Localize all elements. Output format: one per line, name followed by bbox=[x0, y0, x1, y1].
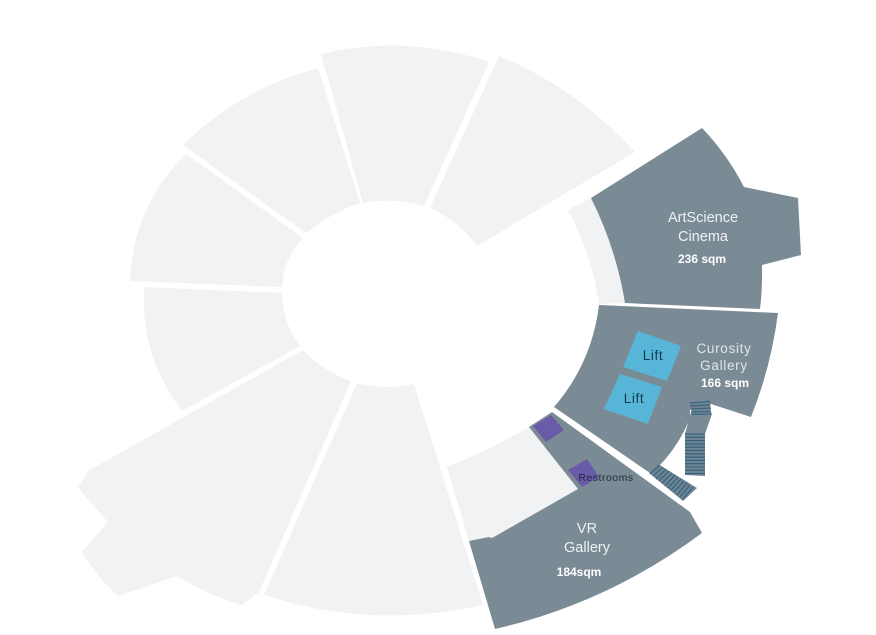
section: beside VR gallery bbox=[447, 427, 578, 541]
stairs: upper bbox=[690, 400, 711, 415]
stairs: lower bbox=[649, 464, 697, 501]
section: bottom left large bbox=[78, 350, 351, 605]
section: left lower bbox=[144, 287, 300, 411]
stairs: middle bbox=[685, 433, 705, 476]
icon: restroom 2 bbox=[568, 459, 599, 487]
icon: Lift 1 bbox=[623, 331, 681, 381]
section: left upper bbox=[130, 154, 303, 287]
label: VR: VR bbox=[577, 521, 597, 537]
section: top right bbox=[430, 56, 635, 246]
section: bottom bbox=[264, 383, 483, 615]
panel: VR Gallery bbox=[469, 412, 702, 629]
section: upper left bbox=[183, 68, 360, 233]
label: 184sqm: 184sqm bbox=[557, 565, 601, 579]
panel: Curosity Gallery bbox=[554, 305, 778, 501]
label: Cinema: Cinema bbox=[678, 229, 729, 245]
label: ArtScience: ArtScience bbox=[668, 210, 738, 226]
stair connector bbox=[685, 412, 712, 434]
label: Lift: Lift bbox=[643, 348, 663, 363]
icon: restroom 1 bbox=[533, 415, 564, 442]
section: top bbox=[321, 46, 489, 206]
label: 166 sqm: 166 sqm bbox=[701, 376, 749, 390]
label: Gallery: Gallery bbox=[564, 540, 611, 556]
label: Restrooms: Restrooms bbox=[578, 472, 634, 484]
label: 236 sqm: 236 sqm bbox=[678, 252, 726, 266]
label: Lift: Lift bbox=[624, 391, 644, 406]
unused sections bbox=[78, 46, 635, 615]
icon: Lift 2 bbox=[604, 374, 662, 424]
label: Curosity: Curosity bbox=[696, 341, 752, 356]
panel: ArtScience Cinema bbox=[591, 128, 801, 309]
section: beside cinema bbox=[568, 198, 625, 304]
label: Gallery: Gallery bbox=[700, 358, 748, 373]
